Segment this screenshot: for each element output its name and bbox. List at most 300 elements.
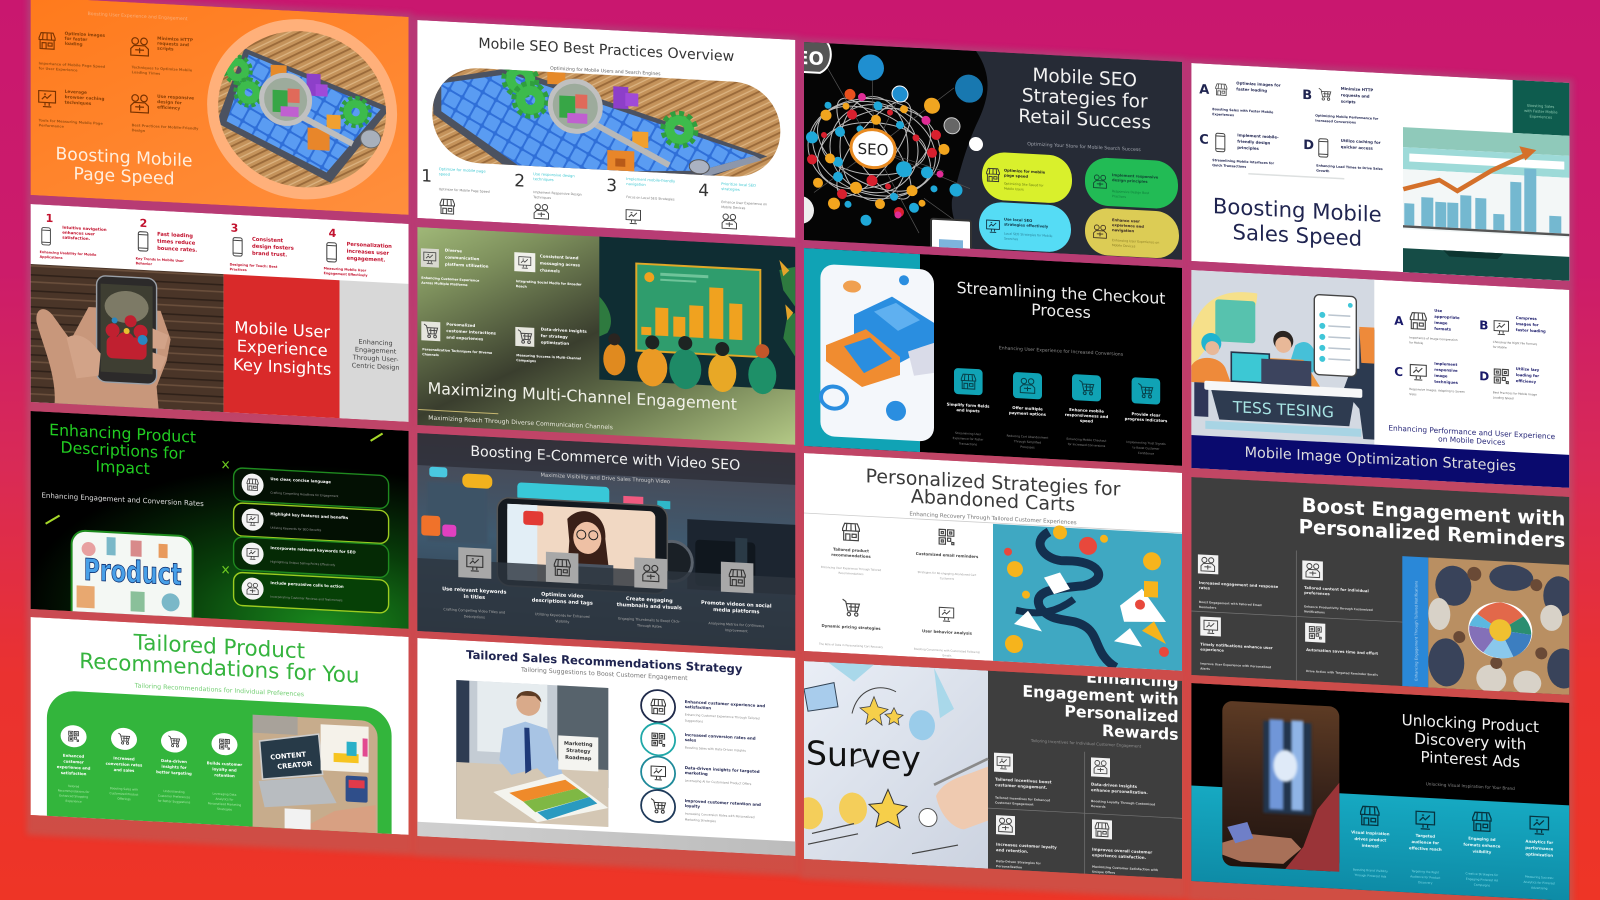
tip: keywords: Descriptions [464,614,485,620]
item: data-driven: Measuring Success in Multi-Channel [516,353,581,361]
step: simplify forms: Experience for Faster [953,436,984,442]
step 2: Implement Responsive Design [533,190,582,197]
item: optimize images: for faster [65,36,88,43]
item B: for Mobile [1493,345,1507,350]
item: minimize HTTP: Techniques to Optimize Mobile [132,65,192,72]
step: responsiveness: for Increased Conversions [1068,442,1106,448]
item: incentives: Tailored Incentives for Enhanced [995,796,1050,802]
item: responsive design: design for [157,99,183,106]
item: dynamic pricing [818,598,883,649]
item: satisfaction: Maximizing Customer Satisfaction with [1092,865,1158,872]
item: consistent messaging: Consistent brand [540,253,578,260]
item A: Experiences [1212,112,1234,117]
card: enhanced experience: Enhanced Shopping [59,794,88,799]
item: diverse platforms: Across Multiple Platforms [421,281,468,287]
step: progress indicators: progress indicators [1125,416,1168,423]
card: data-driven: Customer Preferences [158,794,190,799]
panel: Mobile SEO Strategies for Retail Success [786,39,1182,266]
step: payment options: Processes [1020,445,1035,450]
panel: Maximizing Multi-Channel Engagement [417,227,795,445]
item B: scripts [1341,99,1356,104]
tip: thumbnails: thumbnails and visuals [617,602,682,611]
title: Tailored Sales Recommendations Strategy [466,648,743,676]
accents [46,416,383,581]
step: payment options: Offer multiple [1012,405,1043,412]
title: Retail Success [1018,106,1151,134]
item: customer experience [641,689,765,728]
divider [418,409,498,414]
item: engagement rates: Boost Engagement with Tailored Email [1199,600,1262,607]
item: incentives [994,753,1052,807]
step 2: 2 [514,171,525,192]
item A: faster loading [1236,86,1267,93]
item: responsive design: Use responsive [157,95,194,102]
item 2: Fast loading [157,232,193,240]
item: targeted marketing: marketing [685,770,708,776]
title: Recommendations for You [79,649,360,689]
step: simplify forms: and inputs [956,407,980,413]
side strip: Enhancing Engagement Through Tailored Notifications [1414,581,1418,681]
item 1: enhances user [62,230,95,236]
step: responsiveness: Enhancing Mobile Checkout [1067,437,1106,443]
step 3: 3 [606,176,617,196]
image: content creator desk: CREATOR [277,760,314,771]
item: engagement rates: Reminders [1199,605,1217,610]
card: enhanced experience: customer [63,759,84,765]
pill: responsive design [1085,157,1178,210]
subtitle: Optimizing for Mobile Users and Search Engines [550,65,661,77]
image: isometric checkout [820,264,934,442]
label block: Experiences [1530,115,1552,120]
title: Boosting Mobile [1213,194,1382,228]
image: man with marketing roadmap: Marketing [564,741,593,748]
step: key features: Highlight key features and benefits [270,511,349,520]
image: video camera [421,466,795,601]
card: ad formats: Creative Strategies for [1466,871,1498,877]
panel: Tailored Sales Recommendations Strategy [417,638,795,857]
item: satisfaction: experience satisfaction. [1092,852,1147,860]
item: data-driven [515,325,587,366]
image: man with marketing roadmap: Roadmap [565,755,592,762]
subtitle: Boosting User Experience and Engagement [88,11,188,22]
step: payment options [1007,372,1049,450]
top band [417,433,795,485]
teal band [1191,786,1569,900]
item: customer experience: satisfaction [685,704,711,710]
step: simplify forms: Streamlining User [955,431,981,436]
pill: local SEO: strategies effectively [1004,223,1049,229]
item A: image [1434,320,1448,325]
item: responsive design [132,94,198,132]
item: minimize HTTP: Minimize HTTP [157,37,193,44]
item D [1304,138,1382,172]
title band [1191,435,1569,488]
card: enhanced experience: Tailored [68,784,79,789]
card: ad formats [1463,812,1501,888]
item C: C [1199,132,1209,148]
item: browser caching [38,90,104,128]
panel: Streamlining the Checkout Process [804,248,1182,466]
step: progress indicators: Implementing Trust Signals [1126,440,1166,446]
item D: loading for [1516,372,1539,378]
pill: local SEO: Local SEO Strategies for Mobile [1004,232,1052,238]
item: tailored content: Tailored content for individual [1304,585,1369,593]
step 3: Focus on Local SEO Strategies [626,195,675,202]
item: timely notifications: Alerts [1200,666,1210,671]
item: conversion rates [641,722,756,760]
pill: responsive design: Practices [1112,194,1126,199]
item: user behavior: User behavior analysis [922,628,973,636]
image: phone with magnifier [432,68,780,177]
item: data-driven: optimization [541,339,569,346]
title: Sales Speed [1233,220,1362,252]
item: responsive design: Best Practices for Mobile-Friendly [132,123,198,131]
item D: Enhancing Load Times to Drive Sales [1316,164,1383,171]
item: optimize images: Optimize images [65,32,105,39]
pill: optimize for mobile: Optimize for mobile [1004,169,1045,175]
pill: user experience: experience and [1112,223,1144,229]
item: timely notifications: experience [1200,646,1224,653]
label block [1513,80,1570,138]
card: loyalty: Analytics for [215,797,234,802]
pill: user experience: navigation [1112,228,1134,233]
title: Descriptions for [61,438,185,463]
item 3: 3 [231,222,238,235]
item: browser caching: Leverage [65,90,87,96]
panel: gray subtitle block: Enhancing [359,338,393,348]
item B: Optimizing Mobile Performance for [1315,114,1378,121]
item D: Growth [1316,169,1330,173]
step 4: 4 [698,181,709,201]
panel: gray subtitle block [340,280,409,422]
item: loyalty: and retention. [996,847,1029,854]
card: increased conversion: Boosting Sales with [110,786,138,792]
step: responsiveness: Enhance mobile [1069,407,1104,414]
item 4: Personalization [347,242,392,250]
image: road map illustration [993,522,1182,671]
tip: descriptions: Optimize video [541,592,583,600]
subtitle: Maximizing Reach Through Diverse Communication Channels [428,415,613,431]
item: retention: loyalty [685,803,700,809]
panel: Mobile SEO Best Practices Overview [417,20,797,238]
card: loyalty: retention [214,772,235,778]
item: consistent messaging: messaging across [540,260,581,268]
item: targeted marketing: Leveraging AI for Customized Product Offers [685,779,752,786]
item: timely notifications: Timely notifications enhance user [1200,641,1273,650]
step: progress indicators: to Boost Customer [1133,445,1160,451]
step: calls to action: Incorporating Customer Reviews and Testimonials [270,595,343,602]
green panel [47,690,392,834]
item B [1303,87,1378,124]
card: targeted audience: Audience for Product [1410,874,1441,880]
pill: local SEO [979,201,1071,253]
step: calls to action: Include persuasive calls to action [270,580,344,589]
image: content creator desk [253,715,378,833]
subtitle: Tailoring Suggestions to Boost Customer Engagement [520,666,688,682]
icon: monitor [39,91,56,107]
item 4: increases user [347,249,389,257]
item B: B [1302,88,1312,103]
item: data-driven: Data-driven insights [541,326,587,334]
step 1: 1 [421,166,432,187]
item: browser caching: Performance [39,123,64,129]
item: email reminders [916,528,979,582]
step 3: navigation [626,182,646,187]
label block: with Faster Mobile [1524,109,1558,115]
card: data-driven: Data-driven [161,758,187,764]
step: simplify forms: Transactions [958,441,978,447]
item: retention: Increasing Conversion Rates with Personalized [685,812,754,819]
item: tailored content [1302,560,1373,617]
item: product recommendations: Tailored product [833,547,869,553]
panel: Boosting Mobile Page Speed [31,0,409,215]
card: increased conversion [106,727,143,802]
tip: social [701,561,772,635]
step 1: Optimize for mobile page [439,167,486,174]
step: payment options: payment options [1009,410,1047,417]
panel: Enhancing Product Descriptions for Impact [31,411,409,648]
image: survey with hand and pen: Survey [806,733,921,778]
step 1: Optimize for Mobile Page Speed [439,187,490,194]
item A [1394,306,1460,347]
step 3 [606,176,676,226]
item A: A [1199,82,1209,98]
card: visual inspiration: Visual inspiration [1351,829,1389,836]
tip: social: media platforms [713,607,759,615]
item: personalized: Channels [422,352,439,357]
pill: optimize for mobile [982,151,1072,204]
item 3: Consistent [252,237,283,244]
item: personalized [421,320,497,360]
item: browser caching: browser caching [65,94,104,102]
card: increased conversion: conversion rates [106,761,143,768]
image: man with marketing roadmap: Strategy [566,748,591,755]
card: ad formats: formats enhance [1463,842,1501,849]
tip: social: Analyzing Metrics for Continuous [708,621,764,628]
title: Strategies for [1022,85,1148,113]
tip: keywords: in titles [464,594,485,601]
title: Tailored Product [134,630,305,664]
item: insights: Data-driven insights [1091,782,1137,789]
title: Impact [95,456,150,478]
tip: descriptions: Visibility [555,619,569,624]
panel: Boosting Mobile Sales Speed [1191,63,1570,281]
item: conversion rates: Increased conversion rates and [685,732,756,741]
item: automation [1305,623,1378,677]
tip: thumbnails: Engaging Thumbnails to Boost Click- [618,617,680,624]
item: loyalty: Data-Driven Strategies for [996,859,1041,865]
item B [1479,313,1546,352]
panel: gray subtitle block: Engagement [355,346,397,356]
title: Enhancing Product [49,420,196,447]
panel: Personalized Strategies for Abandoned Carts [804,453,1182,671]
panel: Boosting E-Commerce with Video SEO [417,433,795,651]
item B: faster loading [1516,327,1546,334]
card: enhanced experience: Recommendations for [58,788,90,794]
item B: Minimize HTTP [1341,86,1373,93]
item 2 [136,217,197,269]
step 2 [514,171,582,221]
item: consistent messaging [514,252,582,292]
tip: descriptions: descriptions and tags [532,598,593,607]
title: Personalized Reminders [1299,515,1565,552]
pill: optimize for mobile: Optimizing Site Speed for [1004,182,1044,188]
item A: appropriate [1434,314,1460,320]
item: engagement rates: Increased engagement and response [1199,580,1278,589]
item: retention: Improved customer retention and [685,798,761,807]
card: data-driven [156,730,192,804]
image: survey with hand and pen [795,661,988,869]
item: engagement rates: rates [1199,585,1211,591]
item A [1199,82,1281,116]
item 1: 1 [46,212,53,225]
card: analytics: Analytics for [1525,839,1553,845]
card: loyalty: Leveraging Data [213,792,236,797]
item C: image [1434,373,1448,378]
item D: efficiency [1516,378,1537,384]
item: minimize HTTP: scripts [157,46,174,53]
title: Maximizing Multi-Channel Engagement [428,379,737,414]
item: satisfaction: Improves overall customer [1092,847,1152,855]
image: product card: Product [84,553,182,593]
item: consistent messaging: Reach [516,284,527,289]
card: analytics: performance [1525,845,1554,851]
image: photo with lit window [1222,701,1339,872]
item: personalized: customer interactions [446,328,497,336]
item 3 [230,221,294,275]
tip: social: Promote videos on social [701,600,772,610]
step: clear language: Use clear, concise language [270,476,331,484]
card: visual inspiration: Boosting Brand Visibility [1353,867,1388,873]
item D: Utilize caching for [1341,138,1381,145]
title: Discovery with [1414,730,1526,754]
teal strip [804,248,920,452]
step 4: Mobile Devices [721,205,746,210]
panel: Enhancing Engagement with Personalized Rewards [795,652,1182,879]
item 2: 2 [140,217,147,230]
item: dynamic pricing: The Role of Data in Personalizing Cart Recovery [818,642,883,649]
item 3: brand trust. [252,251,287,258]
item: personalized: Personalized [446,322,475,328]
icon: store [39,32,55,49]
item: conversion rates: sales [685,737,697,743]
card: analytics [1523,816,1556,891]
divider [1248,173,1344,180]
item: conversion rates: Boosting Sales with Data-Driven Insights [685,746,746,753]
bottom band [417,822,795,857]
item: product recommendations: recommendations [831,552,871,559]
image: audience watching bar chart [599,237,795,396]
pill: optimize for mobile: page speed [1004,174,1028,179]
item: retention [641,789,761,827]
image: team at TESS TESING desk: TESS TESING [1232,398,1334,421]
item: insights [1091,757,1155,811]
card: analytics: optimization [1526,851,1553,858]
tip: descriptions [532,551,593,625]
tip: thumbnails: Through Rates [636,623,662,629]
item: dynamic pricing: Dynamic pricing strategies [821,623,881,631]
item: incentives: Tailored incentives boost [995,777,1051,784]
title: Boosting E-Commerce with Video SEO [470,444,740,474]
item: email reminders: Customers [940,576,955,581]
item: data-driven: Campaigns [516,358,536,363]
card: ad formats: visibility [1473,849,1492,855]
item: customer experience: Enhancing Customer Experience Through Tailored [685,713,760,720]
item 1: Applications [40,255,63,260]
item 1: satisfaction. [62,235,91,241]
card: targeted audience [1409,811,1442,885]
item: automation: Drive Action with Targeted Reminder Emails [1306,669,1378,677]
tip: social: Improvement [725,628,748,633]
card: data-driven: for Better Suggestions [158,799,191,804]
step: keywords: Incorporate relevant keywords for SEO [270,545,356,555]
step 1 [421,166,490,216]
item C: Responsive Images: Adapting to Screen [1409,387,1465,394]
card: increased conversion: Customized Product [110,791,139,797]
grid lines [988,747,1182,879]
image: people around a wheel [1428,557,1579,697]
card: data-driven: insights for [161,764,187,770]
item: responsive design: efficiency [157,104,180,112]
card: targeted audience: audience for [1412,839,1439,845]
title: Mobile SEO [1032,65,1137,91]
item B: Increased Conversions [1315,119,1356,125]
panel: red title block: Mobile User [234,318,330,342]
item 2: Key Trends in Mobile User [136,257,184,263]
item: email reminders: Strategies for Re-engaging Abandoned Cart [918,570,976,577]
panel: Tailored Product Recommendations for You [31,617,409,835]
item: user behavior [914,606,980,659]
item: minimize HTTP [132,36,193,75]
title: Page Speed [74,164,174,190]
item 4 [324,226,392,279]
tip: thumbnails: Create engaging [626,596,673,604]
image: product card [72,530,193,637]
step: clear language: Crafting Compelling Headlines for Engagement [270,491,339,498]
side strip [1402,556,1428,687]
item: diverse platforms: Diverse [445,247,462,253]
subtitle: Enhancing Recovery Through Tailored Customer Experiences [909,512,1077,526]
item A: for Mobile [1409,340,1423,345]
card: data-driven: better targeting [156,769,192,776]
step: key features: Utilizing Keywords for SEO Benefits [270,526,322,532]
item C: Streamlining Mobile Interfaces for [1212,158,1274,165]
panel: Mobile User Experience Key Insights [31,204,409,422]
title: Boost Engagement with [1302,494,1565,531]
divider [804,513,1182,533]
item: insights: Rewards [1091,804,1106,809]
image ring [207,14,397,204]
image: phone with magnifier [218,31,386,188]
card: ad formats: Campaigns [1474,883,1490,888]
step 4: strategies [721,187,740,192]
subtitle: Unlocking Visual Inspiration for Your Brand [1426,781,1515,791]
item C: C [1394,365,1403,379]
panel: red title block: Experience [237,336,328,360]
card: analytics: Measuring Success: [1525,875,1554,880]
item: product recommendations [821,522,881,577]
item: email reminders: Customized email reminders [916,551,979,559]
item: engagement rates [1198,554,1279,613]
item: consistent messaging: Integrating Social Media for Broader [516,279,582,287]
item C: Quick Transactions [1212,163,1246,169]
card: analytics: Advertising [1531,886,1548,891]
card: increased conversion: and sales [114,767,135,773]
label block: Boosting Sales [1527,104,1554,109]
item: targeted marketing: Data-driven insights for targeted [685,765,760,774]
item D [1479,364,1540,402]
card: analytics: Analytics for Pinterest [1523,880,1556,886]
